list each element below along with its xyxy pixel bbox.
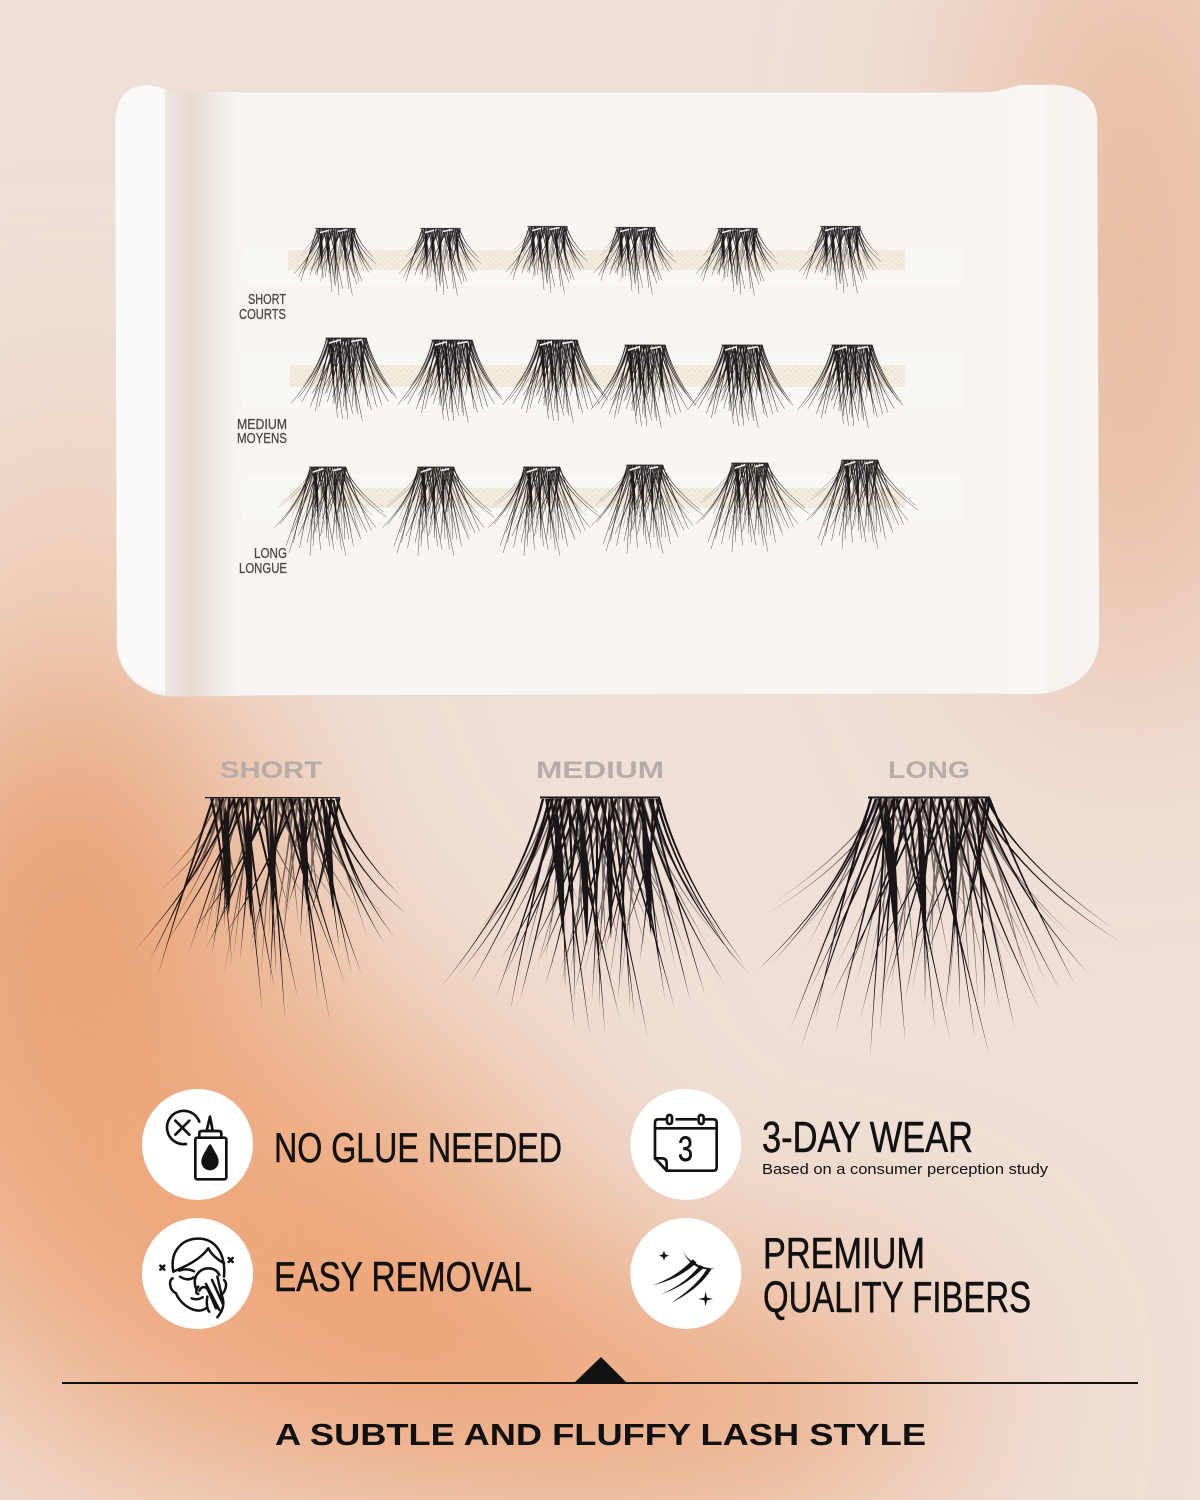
icon: calendar: 3	[678, 1130, 693, 1169]
label: QUALITY FIBERS	[763, 1273, 1031, 1322]
label	[763, 1229, 1031, 1322]
icon: glue bottle crossed out	[142, 1089, 253, 1200]
tagline: A SUBTLE AND FLUFFY LASH STYLE	[275, 1417, 926, 1452]
tray label: long: LONGUE	[239, 560, 287, 577]
feature: easy removal	[142, 1218, 532, 1329]
heading: short: SHORT	[220, 757, 322, 784]
product tray	[115, 84, 1100, 697]
feature: no glue needed	[142, 1089, 562, 1200]
tray label: long: LONG	[254, 545, 287, 562]
tray label: long	[239, 545, 287, 577]
label: PREMIUM	[763, 1229, 925, 1278]
tray label: short: COURTS	[239, 306, 286, 323]
long lash close-up	[752, 796, 1125, 1058]
tray label: short: SHORT	[248, 291, 286, 308]
icon: face with cotton pad	[142, 1218, 253, 1329]
short lash close-up	[135, 797, 408, 1022]
heading: medium: MEDIUM	[536, 757, 664, 784]
tray row: long lashes	[275, 460, 919, 556]
tray row: medium lashes	[292, 338, 903, 428]
tray label: medium: MOYENS	[237, 430, 287, 447]
note: Based on a consumer perception study	[762, 1161, 1049, 1178]
feature: 3-day wear	[630, 1089, 1049, 1200]
label: 3-DAY WEAR	[762, 1113, 973, 1162]
tray row: short lashes	[294, 226, 881, 296]
tray label: medium: MEDIUM	[237, 416, 287, 433]
tray label: medium	[237, 416, 287, 447]
tray label: short	[239, 291, 286, 323]
divider with triangle	[62, 1357, 1138, 1384]
icon: lash with sparkles	[630, 1218, 741, 1329]
label: EASY REMOVAL	[274, 1253, 532, 1300]
heading: long: LONG	[888, 757, 970, 784]
label: NO GLUE NEEDED	[274, 1124, 562, 1171]
feature: premium quality fibers	[630, 1218, 1031, 1329]
icon: calendar	[630, 1089, 741, 1200]
medium lash close-up	[440, 796, 750, 1040]
